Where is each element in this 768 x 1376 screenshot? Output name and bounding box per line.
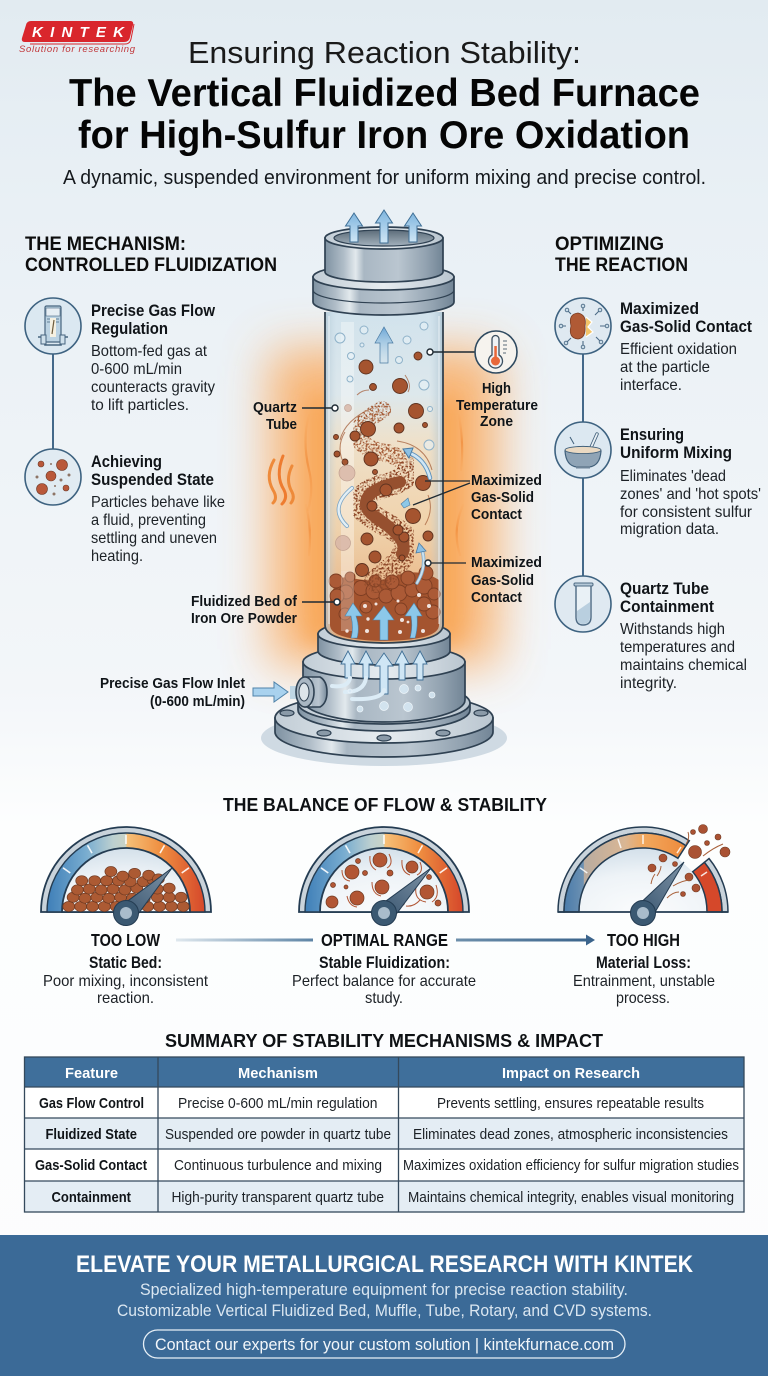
ore bed xyxy=(329,566,440,641)
inlet nozzle xyxy=(290,677,327,707)
quartz tube xyxy=(325,312,443,643)
bed gas arrows xyxy=(345,603,422,640)
gauge: optimal range xyxy=(299,827,469,926)
icon: suspended particles xyxy=(25,449,81,505)
title xyxy=(69,35,700,157)
base bubbles xyxy=(348,684,435,712)
heading: the mechanism: THE MECHANISM: xyxy=(25,234,186,255)
text: precise gas flow regulation: Precise Gas Flow xyxy=(91,302,215,320)
text: achieving suspended state: Suspended State xyxy=(91,471,214,489)
title: for High-Sulfur Iron Ore Oxidation xyxy=(78,114,690,157)
label: maximized gas-solid contact upper: Contact xyxy=(471,507,522,523)
table row: fluidized state xyxy=(46,1126,728,1143)
text: ensuring uniform mixing xyxy=(620,426,761,538)
text: achieving suspended state: Particles behave like xyxy=(91,494,225,511)
contact button: Contact our experts for your custom solution | kintekfurnace.com xyxy=(155,1335,614,1354)
suspended ore xyxy=(326,853,441,908)
label: maximized gas-solid contact lower: Gas-Solid xyxy=(471,573,534,589)
text: optimal range xyxy=(292,930,476,1007)
label: high temperature zone: High xyxy=(482,381,511,397)
text: too low xyxy=(43,930,209,1007)
footer description xyxy=(117,1280,652,1320)
text: achieving suspended state xyxy=(91,453,225,565)
text: achieving suspended state: a fluid, preventing xyxy=(91,512,206,529)
label: maximized gas-solid contact lower xyxy=(425,555,542,606)
text: too low: Static Bed: xyxy=(89,954,162,972)
text: maximized gas-solid contact: interface. xyxy=(620,377,682,394)
bubbles xyxy=(335,322,434,450)
swirl strokes xyxy=(340,375,432,525)
icon: mixing bowl xyxy=(555,422,611,478)
summary table xyxy=(24,1057,744,1212)
heat glow xyxy=(270,350,498,665)
table row: fluidized state: Suspended ore powder in quartz tube xyxy=(165,1126,391,1143)
label: fluidized bed of iron ore powder: Fluidized Bed of xyxy=(191,594,297,610)
label: maximized gas-solid contact lower: Maximized xyxy=(471,555,542,571)
text: quartz tube containment: maintains chemical xyxy=(620,657,747,674)
text: quartz tube containment xyxy=(620,580,747,692)
top collar and flange xyxy=(313,227,454,315)
section heading: summary: SUMMARY OF STABILITY MECHANISMS & IMPACT xyxy=(165,1030,604,1051)
title: Ensuring Reaction Stability: xyxy=(188,35,581,70)
table header xyxy=(65,1065,640,1082)
footer banner xyxy=(0,1235,768,1376)
text: too high xyxy=(573,930,715,1007)
gauge: too high xyxy=(558,824,730,926)
text: too high: Entrainment, unstable xyxy=(573,973,715,990)
tube gas arrow xyxy=(375,327,393,363)
text: precise gas flow regulation: 0-600 mL/min xyxy=(91,361,182,378)
text: ensuring uniform mixing: zones' and 'hot spots' xyxy=(620,486,761,503)
base gas flow lines xyxy=(332,678,384,699)
table row: fluidized state: Fluidized State xyxy=(46,1126,137,1143)
table row: gas flow control: Prevents settling, ensures repeatable results xyxy=(437,1095,704,1112)
table row: gas flow control: Precise 0-600 mL/min regulation xyxy=(178,1095,378,1112)
icon: gas-solid contact xyxy=(555,298,611,354)
text: optimal range: OPTIMAL RANGE xyxy=(321,930,448,950)
outlet gas arrows xyxy=(346,210,422,243)
heading: optimizing the reaction: THE REACTION xyxy=(555,255,688,276)
text: maximized gas-solid contact xyxy=(620,300,752,394)
text: ensuring uniform mixing: Uniform Mixing xyxy=(620,444,732,462)
footer description: Specialized high-temperature equipment for precise reaction stability. xyxy=(140,1280,628,1299)
text: precise gas flow regulation: Regulation xyxy=(91,320,168,338)
text: precise gas flow regulation: counteracts gravity xyxy=(91,379,215,396)
gauge: too low xyxy=(41,827,211,926)
swirl arrows xyxy=(339,448,430,583)
label: quartz tube xyxy=(253,400,338,433)
footer description: Customizable Vertical Fluidized Bed, Muffle, Tube, Rotary, and CVD systems. xyxy=(117,1301,652,1320)
table header: Impact on Research xyxy=(502,1065,640,1082)
text: maximized gas-solid contact: Efficient oxidation xyxy=(620,341,737,358)
text: quartz tube containment: temperatures and xyxy=(620,639,735,656)
label: maximized gas-solid contact upper: Gas-Solid xyxy=(471,490,534,506)
logo: KINTEK xyxy=(19,21,136,55)
label: quartz tube: Tube xyxy=(266,417,297,433)
label: fluidized bed of iron ore powder: Iron Ore Powder xyxy=(191,611,297,627)
label: maximized gas-solid contact lower: Contact xyxy=(471,590,522,606)
heading: the mechanism: CONTROLLED FLUIDIZATION xyxy=(25,255,277,276)
text: precise gas flow regulation xyxy=(91,302,215,414)
table row: gas flow control: Gas Flow Control xyxy=(39,1095,144,1112)
text: quartz tube containment: Quartz Tube xyxy=(620,580,709,598)
text: precise gas flow regulation: Bottom-fed gas at xyxy=(91,343,208,360)
text: quartz tube containment: Containment xyxy=(620,598,714,616)
text: ensuring uniform mixing: Eliminates 'dead xyxy=(620,468,726,485)
text: too low: Poor mixing, inconsistent xyxy=(43,973,209,990)
logo: KINTEK: KINTEK xyxy=(32,24,125,41)
panel: the mechanism xyxy=(25,234,277,565)
base shadow xyxy=(261,710,507,766)
title: The Vertical Fluidized Bed Furnace xyxy=(69,72,700,115)
text: maximized gas-solid contact: at the particle xyxy=(620,359,710,376)
subtitle: A dynamic, suspended environment for uniform mixing and precise control. xyxy=(63,167,706,189)
table row: containment: Containment xyxy=(52,1189,131,1206)
heading: optimizing the reaction xyxy=(555,234,688,276)
table row: gas-solid contact xyxy=(35,1157,739,1174)
text: achieving suspended state: settling and uneven xyxy=(91,530,217,547)
label: high temperature zone: Temperature xyxy=(456,398,538,414)
heat flames xyxy=(269,345,463,555)
text: optimal range: Stable Fluidization: xyxy=(319,954,450,972)
table row: gas-solid contact: Gas-Solid Contact xyxy=(35,1157,147,1174)
heading: optimizing the reaction: OPTIMIZING xyxy=(555,234,664,255)
particle stream xyxy=(359,410,409,581)
section heading: balance of flow: THE BALANCE OF FLOW & STABILITY xyxy=(223,794,548,815)
text: ensuring uniform mixing: for consistent sulfur xyxy=(620,504,753,521)
text: precise gas flow regulation: to lift particles. xyxy=(91,397,189,414)
text: too high: TOO HIGH xyxy=(607,930,680,950)
panel: optimizing the reaction xyxy=(555,234,761,692)
label: maximized gas-solid contact upper: Maximized xyxy=(471,473,542,489)
footer heading: ELEVATE YOUR METALLURGICAL RESEARCH WITH KINTEK xyxy=(76,1251,694,1278)
base gas arrows xyxy=(341,651,427,694)
furnace illustration xyxy=(261,210,507,766)
label: high temperature zone xyxy=(427,331,538,430)
needle xyxy=(372,868,431,926)
table row: containment: Maintains chemical integrity, enables visual monitoring xyxy=(408,1189,734,1206)
label: fluidized bed of iron ore powder xyxy=(191,594,340,627)
contact button xyxy=(144,1330,625,1358)
text: optimal range: Perfect balance for accurate xyxy=(292,973,476,990)
label: precise gas flow inlet xyxy=(100,676,245,710)
ejected ore xyxy=(648,824,730,896)
ore pile xyxy=(63,866,189,912)
text: optimal range: study. xyxy=(365,990,403,1007)
icon: thermometer xyxy=(475,331,517,373)
particles xyxy=(334,352,433,576)
label: quartz tube: Quartz xyxy=(253,400,297,416)
heading: the mechanism xyxy=(25,234,277,276)
arrow: gas inlet xyxy=(253,682,288,702)
label: precise gas flow inlet: (0-600 mL/min) xyxy=(150,694,245,710)
text: quartz tube containment: integrity. xyxy=(620,675,677,692)
text: maximized gas-solid contact: Maximized xyxy=(620,300,699,318)
needle xyxy=(630,862,684,926)
text: achieving suspended state: heating. xyxy=(91,548,143,565)
icon: quartz test tube xyxy=(555,576,611,632)
text: ensuring uniform mixing: migration data. xyxy=(620,521,719,538)
table header: Feature xyxy=(65,1065,118,1082)
text: maximized gas-solid contact: Gas-Solid Contact xyxy=(620,318,752,336)
table row: containment: High-purity transparent quartz tube xyxy=(172,1189,384,1206)
logo: KINTEK: Solution for researching xyxy=(19,44,136,55)
table row: fluidized state: Eliminates dead zones, atmospheric inconsistencies xyxy=(413,1126,728,1143)
table row: gas-solid contact: Continuous turbulence and mixing xyxy=(174,1157,382,1174)
text: too low: TOO LOW xyxy=(91,930,160,950)
table row: containment xyxy=(52,1189,734,1206)
text: quartz tube containment: Withstands high xyxy=(620,621,725,638)
text: ensuring uniform mixing: Ensuring xyxy=(620,426,684,444)
furnace base xyxy=(275,620,493,757)
label: precise gas flow inlet: Precise Gas Flow Inlet xyxy=(100,676,245,692)
icon: gas flow regulator xyxy=(25,298,81,354)
table row: gas flow control xyxy=(39,1095,704,1112)
arrow: too low to optimal xyxy=(176,938,313,942)
text: achieving suspended state: Achieving xyxy=(91,453,162,471)
label: high temperature zone: Zone xyxy=(480,414,513,430)
text: too high: Material Loss: xyxy=(596,954,691,972)
text: too low: reaction. xyxy=(97,990,154,1007)
table header: Mechanism xyxy=(238,1065,318,1082)
label: maximized gas-solid contact upper xyxy=(413,473,542,523)
arrow: optimal to too high xyxy=(456,934,595,946)
needle xyxy=(114,868,172,926)
text: too high: process. xyxy=(616,990,670,1007)
